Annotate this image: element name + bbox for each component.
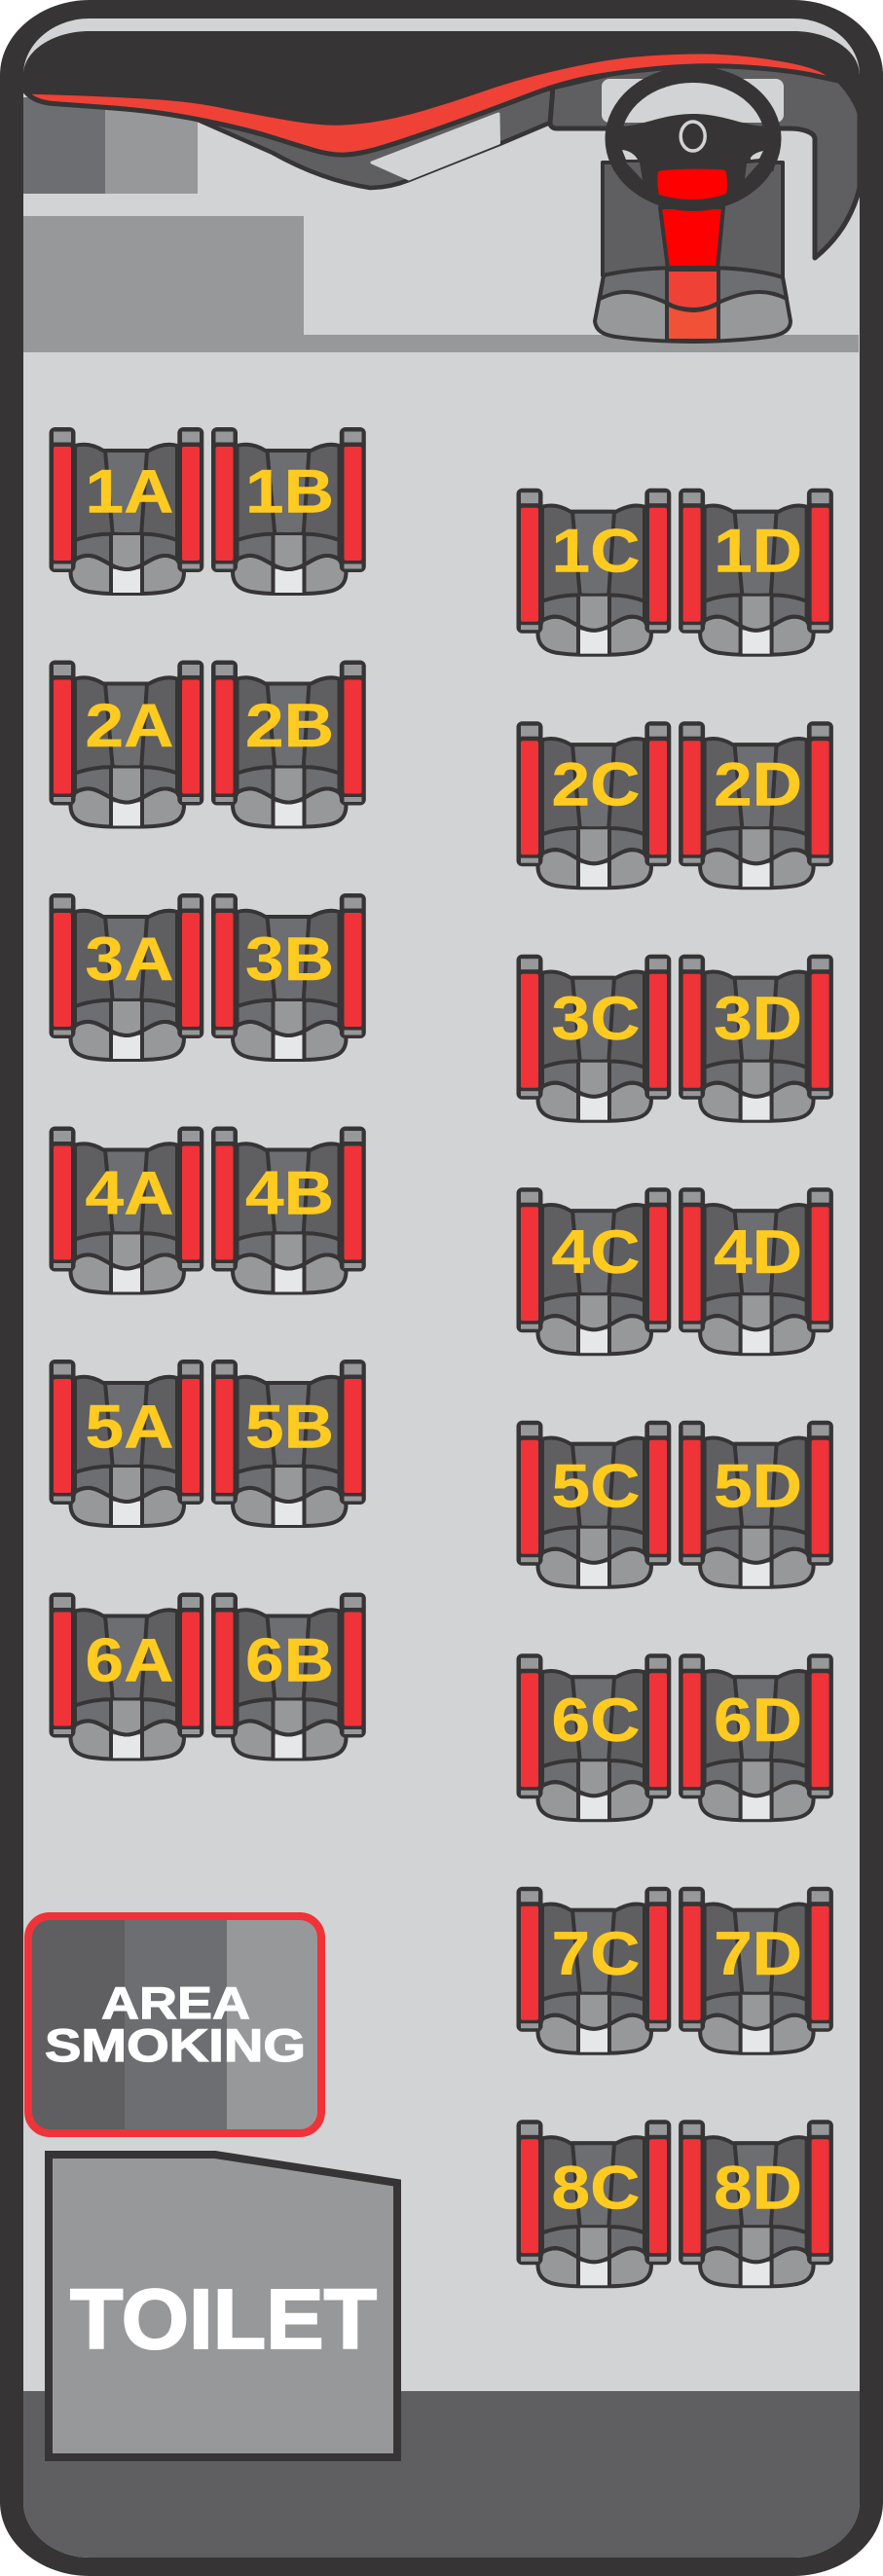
seat 1D: 1D (714, 517, 802, 585)
seat 5C: 5C (551, 1452, 641, 1520)
right dashboard panel (550, 64, 860, 258)
seat 7C (516, 1887, 671, 2053)
seat 4A (49, 1127, 203, 1292)
seat 1C: 1C (551, 517, 641, 585)
seat 4A: 4A (86, 1159, 173, 1227)
seat 2B (211, 660, 366, 827)
seat 3A: 3A (86, 925, 173, 994)
wheel gap slices (626, 163, 759, 180)
wheel spoke openings (622, 150, 763, 160)
seat 3C: 3C (551, 985, 641, 1053)
seat 4B: 4B (245, 1159, 334, 1227)
seat 6C: 6C (551, 1687, 641, 1755)
seat 6B (211, 1592, 366, 1760)
seat 4D: 4D (714, 1218, 802, 1287)
seat 5A: 5A (86, 1394, 173, 1462)
dashboard (23, 31, 860, 258)
seat 8C (516, 2120, 671, 2286)
dashboard red trim (25, 52, 839, 155)
seat 5C (516, 1421, 671, 1587)
seat 6C (516, 1653, 671, 1820)
seat 3B: 3B (245, 925, 334, 994)
seat 2D (679, 721, 833, 888)
horn pad (657, 169, 727, 200)
seat 3D: 3D (714, 985, 802, 1053)
seat 2C: 2C (551, 751, 641, 819)
seat 2B: 2B (245, 692, 334, 760)
smoking label second line: SMOKING (45, 2019, 306, 2071)
seat 1A: 1A (86, 458, 173, 526)
seat 3C (516, 955, 671, 1121)
seat 1A (49, 427, 203, 594)
front floor steps (23, 97, 859, 352)
smoking area panel (28, 1916, 321, 2133)
left dashboard panel (198, 89, 555, 188)
seat 6A (49, 1592, 203, 1760)
steering wheel rim (613, 74, 773, 202)
seat 7D (679, 1887, 833, 2053)
seat 4D (679, 1187, 833, 1354)
seat 4C: 4C (551, 1218, 641, 1287)
smoking area label: AREA (101, 1977, 250, 2028)
seat 7D: 7D (714, 1920, 802, 1988)
driver seat red stripe (660, 207, 723, 269)
driver seat upper cushion (600, 268, 787, 309)
driver seat center lower (667, 304, 718, 341)
seat 3A (49, 893, 203, 1060)
driver seat and steering wheel (595, 74, 791, 342)
seat 8D (679, 2120, 833, 2286)
driver seat back (603, 163, 783, 277)
driver seat center upper (667, 270, 718, 309)
glove box window (372, 114, 498, 179)
seat 5D: 5D (714, 1452, 802, 1520)
seat 8C: 8C (551, 2155, 641, 2223)
seat 3B (211, 893, 366, 1060)
wheel emblem (681, 122, 705, 151)
seat 1B: 1B (245, 458, 334, 526)
seat 3D (679, 955, 833, 1121)
seat 2A: 2A (86, 692, 173, 760)
seat 1C (516, 489, 671, 655)
toilet label: TOILET (70, 2272, 377, 2367)
driver seat cushion (595, 268, 791, 342)
seat 2D: 2D (714, 751, 802, 819)
seat 1B (211, 427, 366, 594)
seat 8D: 8D (714, 2155, 802, 2223)
rear floor band (23, 2391, 860, 2558)
seat 6B: 6B (245, 1627, 334, 1695)
windshield dark area (23, 31, 860, 123)
steering hub (613, 114, 774, 200)
seat 5D (679, 1421, 833, 1587)
seat 6A: 6A (86, 1627, 173, 1695)
seat 1D (679, 489, 833, 655)
instrument cluster (602, 79, 784, 123)
seat 4B (211, 1127, 366, 1292)
seat 4C (516, 1187, 671, 1354)
seat 2C (516, 721, 671, 888)
seat 6D: 6D (714, 1687, 802, 1755)
seat 6D (679, 1653, 833, 1820)
seat 7C: 7C (551, 1920, 641, 1988)
seat 2A (49, 660, 203, 827)
seat 5B (211, 1360, 366, 1526)
seat 5A (49, 1360, 203, 1526)
toilet cabin (49, 2155, 397, 2457)
seat 5B: 5B (245, 1394, 334, 1462)
